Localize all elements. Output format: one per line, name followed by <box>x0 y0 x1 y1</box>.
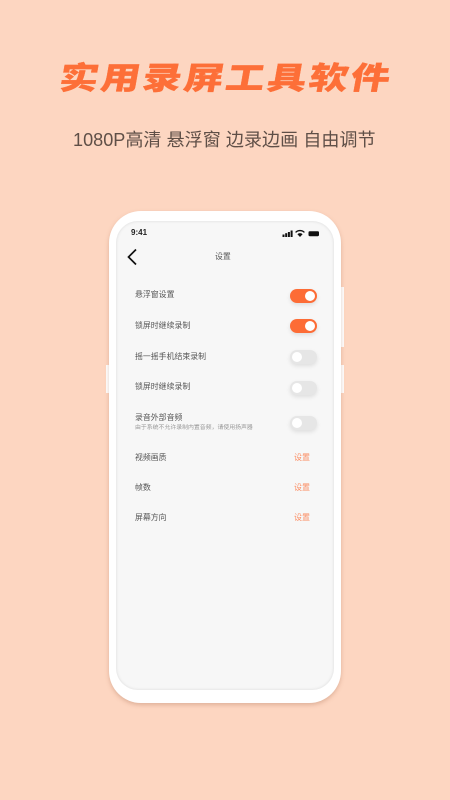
right side button lower <box>340 365 344 393</box>
set link: 设置 <box>294 483 310 492</box>
status bar icons <box>282 230 319 237</box>
setting: shake to stop: 摇一摇手机结束录制 <box>135 352 206 361</box>
set link: 设置 <box>294 513 310 522</box>
setting: screen orientation: 屏幕方向 <box>135 513 167 522</box>
left side button <box>106 365 110 393</box>
page heading: 设置 <box>215 252 231 261</box>
status bar time: 9:41 <box>131 228 147 237</box>
phone body <box>109 211 341 703</box>
screen <box>116 221 334 690</box>
toggle on <box>290 319 317 333</box>
right side button upper <box>340 287 344 347</box>
toggle off <box>290 350 317 364</box>
toggle off <box>290 416 317 430</box>
subtitle: 1080P高清 悬浮窗 边录边画 自由调节 <box>73 130 376 150</box>
back arrow <box>127 248 136 266</box>
phone mockup <box>106 211 344 707</box>
toggle on <box>290 289 317 303</box>
external audio note: 由于系统不允许录制内置音频，请使用扬声器 <box>135 425 253 431</box>
setting: video quality: 视频画质 <box>135 453 167 462</box>
setting: continue on lock second: 锁屏时继续录制 <box>135 382 190 391</box>
setting: frame rate: 帧数 <box>135 483 151 492</box>
setting: external audio: 录音外部音频 <box>135 413 182 422</box>
set link: 设置 <box>294 453 310 462</box>
title: 实用录屏工具软件 <box>56 54 397 98</box>
setting: floating window: 悬浮窗设置 <box>135 290 174 299</box>
toggle off <box>290 381 317 395</box>
setting: continue on lock: 锁屏时继续录制 <box>135 321 190 330</box>
